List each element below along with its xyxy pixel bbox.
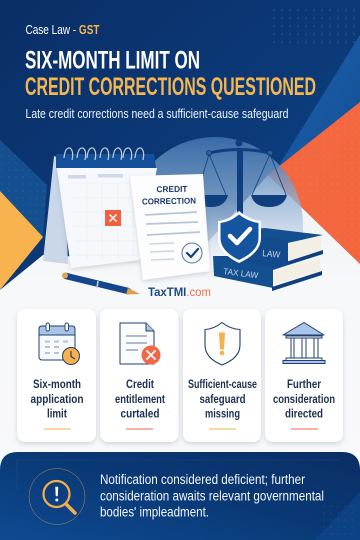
background: orange triangle [268, 102, 360, 264]
title [25, 46, 316, 101]
illustration: books: TAX LAW [223, 266, 259, 280]
icon: magnifier with exclamation [29, 468, 85, 524]
card 3 [183, 309, 261, 442]
label: Further [287, 379, 321, 391]
illustration: pen [62, 272, 140, 294]
label: Six-month [33, 379, 81, 391]
label: curtaled [120, 408, 160, 420]
illustration: credit correction document [130, 174, 210, 280]
background: hero [0, 0, 360, 300]
tag line: Case Law - GST [26, 22, 100, 37]
bottom panel [0, 452, 360, 540]
label: entitlement [115, 394, 165, 406]
label: limit [47, 408, 67, 420]
illustration: books: LAW [262, 248, 281, 260]
illustration: credit correction document: CREDIT [156, 184, 188, 194]
icon: courthouse [283, 322, 325, 364]
label: Sufficient-cause [188, 379, 257, 391]
icon: document with cross [120, 323, 160, 364]
label: safeguard [200, 394, 246, 406]
illustration: books [213, 228, 323, 291]
illustration: shield [218, 211, 261, 263]
card 2 [100, 309, 178, 442]
callout text: consideration awaits relevant governmental [100, 488, 324, 504]
logo: TaxTMI.com: TaxTMI.com [148, 285, 211, 299]
background: light floor [0, 175, 360, 540]
label: missing [205, 408, 240, 420]
background: halo circle [127, 137, 303, 275]
title: SIX-MONTH LIMIT ON [25, 46, 200, 74]
subtitle: Late credit corrections need a sufficient-cause safeguard [26, 107, 289, 121]
illustration: scales [194, 140, 287, 218]
label: consideration [273, 394, 335, 406]
label: Credit [126, 379, 154, 391]
label: directed [285, 408, 323, 420]
callout text: bodies' impleadment. [100, 504, 209, 520]
label: application [30, 394, 84, 406]
card 4 [265, 309, 343, 442]
icon: calendar with clock [39, 323, 80, 364]
background: yellow triangle [0, 191, 43, 290]
illustration: credit correction document: CORRECTION [142, 196, 196, 206]
card 1 [17, 309, 96, 442]
illustration: calendar [43, 148, 157, 268]
callout text: Notification considered deficient; further [100, 472, 305, 487]
icon: shield with exclamation [205, 322, 240, 365]
